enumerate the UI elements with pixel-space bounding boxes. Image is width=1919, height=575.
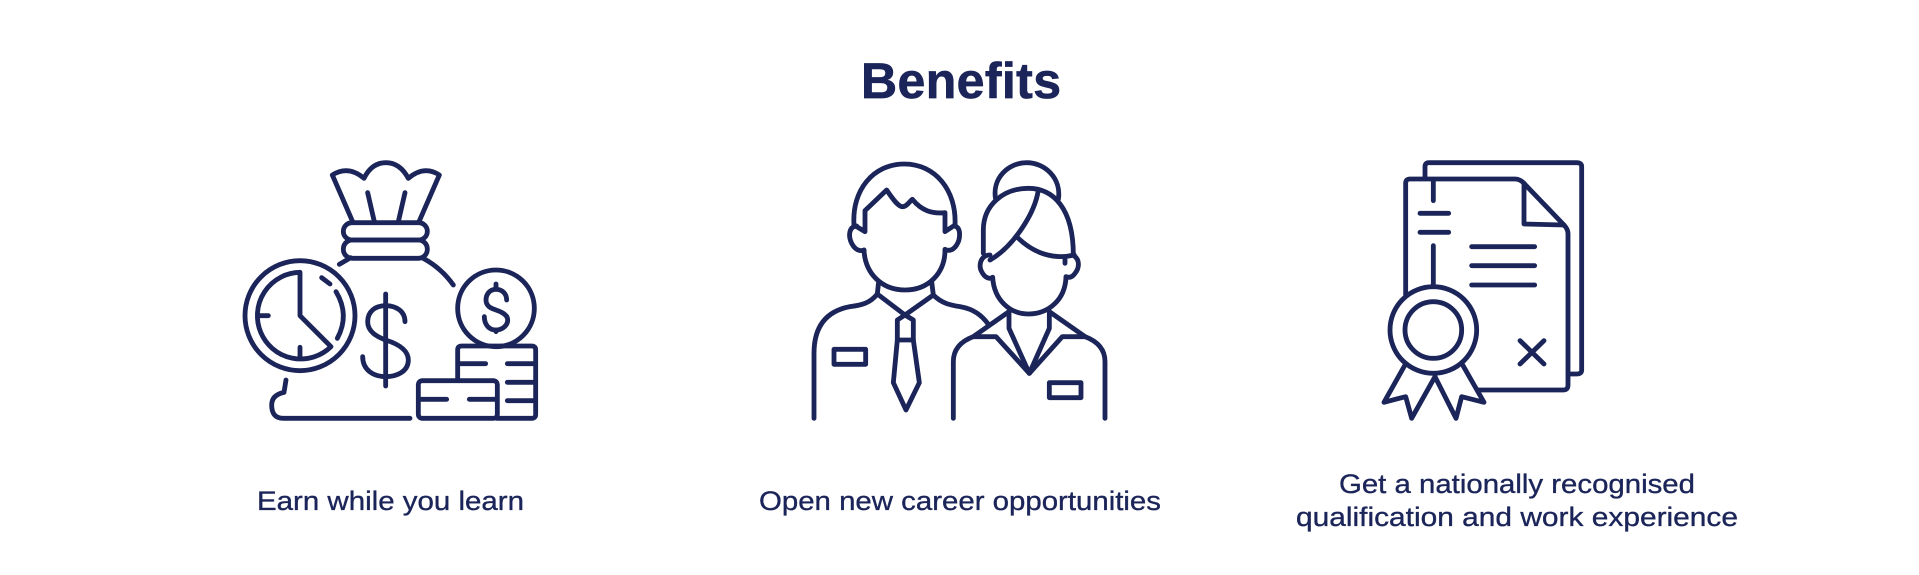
panel: open new career opportunities [759,163,1161,516]
label: qualification and work experience: Get a nationally recognised [1339,469,1695,499]
title: Benefits [861,53,1061,109]
panel: earn while you learn [245,163,536,516]
icon: certificate with rosette [1384,163,1582,418]
icon: two professionals [814,163,1105,418]
label: earn while you learn: Earn while you learn [257,486,524,516]
label: open new career opportunities: Open new career opportunities [759,486,1161,516]
label: qualification and work experience: qualification and work experience [1296,502,1738,532]
icon: money bag with clock and coins [245,163,536,418]
panel: nationally recognised qualification [1296,163,1738,532]
